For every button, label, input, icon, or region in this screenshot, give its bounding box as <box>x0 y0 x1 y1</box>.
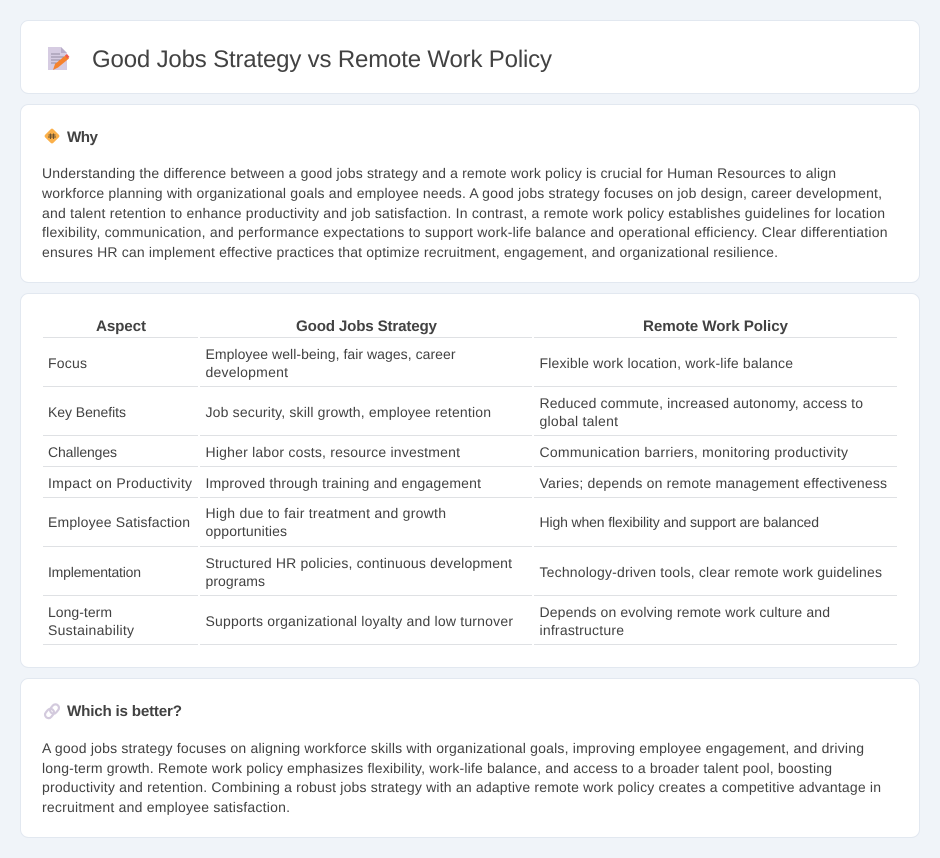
row: key benefits: Reduced commute, increased autonomy, access to <box>540 395 863 411</box>
row: focus: Focus <box>48 355 87 371</box>
row: challenges: Challenges <box>48 444 117 460</box>
heading: why: Why <box>67 129 99 146</box>
row: focus: development <box>206 364 288 380</box>
row: key benefits: global talent <box>540 413 618 429</box>
title: Good Jobs Strategy vs Remote Work Policy <box>92 46 552 73</box>
text block: why paragraph: Understanding the difference between a good jobs strategy and a remote work policy is crucial for Human Resources to align <box>42 165 836 181</box>
row: long-term sustainability: infrastructure <box>540 622 624 638</box>
table header: Good Jobs Strategy <box>296 318 438 335</box>
row: employee satisfaction: opportunities <box>206 523 287 539</box>
row: long-term sustainability <box>48 604 830 638</box>
text block: which is better paragraph: A good jobs strategy focuses on aligning workforce skills with organizational goals, improving employee engagement, and driving <box>42 740 864 756</box>
row: challenges <box>48 444 848 460</box>
row: employee satisfaction: Employee Satisfaction <box>48 514 190 530</box>
panel: header <box>20 20 920 94</box>
text block: why paragraph: flexibility, communication, and performance expectations to support work-life balance and operational efficiency. Clear differentiation <box>42 224 887 240</box>
text block: which is better paragraph <box>42 740 881 815</box>
row: long-term sustainability: Long-term <box>48 604 112 620</box>
row: key benefits <box>48 395 863 429</box>
text block: why paragraph: workforce planning with organizational goals and employee needs. A good jobs strategy focuses on job design, career development, <box>41 185 882 201</box>
row: implementation: Technology-driven tools, clear remote work guidelines <box>540 564 882 580</box>
row: challenges: Communication barriers, monitoring productivity <box>540 444 848 460</box>
text block: why paragraph: ensures HR can implement effective practices that optimize recruitment, engagement, and organizational resilience. <box>42 244 778 260</box>
row: focus: Employee well-being, fair wages, career <box>206 346 456 362</box>
text block: why paragraph <box>41 165 887 260</box>
row: challenges: Higher labor costs, resource investment <box>206 444 460 460</box>
row: long-term sustainability: Supports organizational loyalty and low turnover <box>206 613 513 629</box>
row: employee satisfaction <box>48 505 819 539</box>
table header: Aspect <box>96 318 146 335</box>
text block: which is better paragraph: recruitment and employee satisfaction. <box>42 799 290 815</box>
icon: memo with pencil <box>48 47 70 70</box>
row: impact on productivity: Improved through training and engagement <box>206 475 481 491</box>
icon: warning diamond <box>44 128 60 144</box>
row: focus <box>48 346 793 380</box>
table header <box>96 318 789 335</box>
row: key benefits: Job security, skill growth, employee retention <box>206 404 491 420</box>
row: implementation: Implementation <box>48 564 141 580</box>
row: long-term sustainability: Sustainability <box>48 622 134 638</box>
row: impact on productivity: Varies; depends on remote management effectiveness <box>540 475 887 491</box>
row: focus: Flexible work location, work-life balance <box>540 355 793 371</box>
panel: why <box>20 104 920 282</box>
row: implementation: programs <box>206 573 265 589</box>
row: impact on productivity <box>48 475 887 491</box>
row: implementation <box>48 555 882 589</box>
row: employee satisfaction: High due to fair treatment and growth <box>206 505 446 521</box>
table header: Remote Work Policy <box>643 318 789 335</box>
row: employee satisfaction: High when flexibility and support are balanced <box>540 514 819 530</box>
panel: comparison table <box>20 294 920 668</box>
text block: which is better paragraph: productivity and retention. Combining a robust jobs strategy with an adaptive remote work policy creates a competitive advantage in <box>42 779 881 795</box>
row: long-term sustainability: Depends on evolving remote work culture and <box>540 604 830 620</box>
text block: which is better paragraph: long-term growth. Remote work policy emphasizes flexibility, work-life balance, and access to a broader talent pool, boosting <box>42 760 832 776</box>
heading: which is better: Which is better? <box>67 703 182 720</box>
row: implementation: Structured HR policies, continuous development <box>206 555 512 571</box>
text block: why paragraph: and talent retention to enhance productivity and job satisfaction. In contrast, a remote work policy establishes guidelines for location <box>42 205 885 221</box>
row: key benefits: Key Benefits <box>48 404 126 420</box>
panel: which is better <box>20 678 920 838</box>
row: impact on productivity: Impact on Productivity <box>48 475 192 491</box>
icon: link <box>44 703 60 720</box>
